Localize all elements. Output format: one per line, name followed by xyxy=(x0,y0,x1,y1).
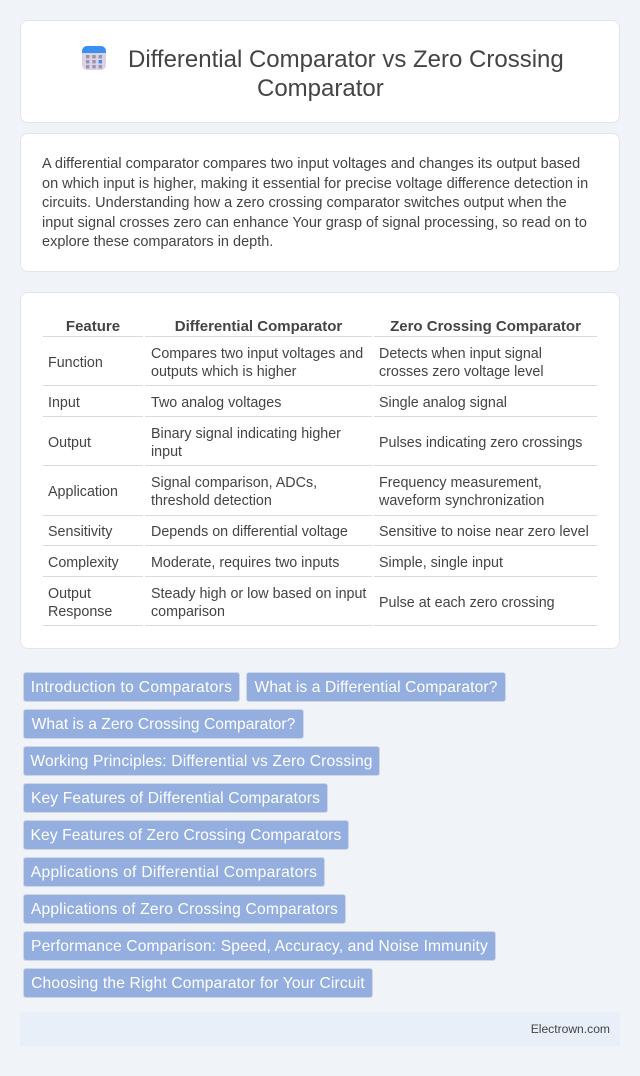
row: function xyxy=(48,346,544,380)
row: function: Compares two input voltages and xyxy=(151,346,363,362)
row: output: Pulses indicating zero crossings xyxy=(379,435,582,451)
row: complexity: Complexity xyxy=(48,555,119,571)
tag: applications zero crossing xyxy=(23,894,346,924)
row: application: Frequency measurement, xyxy=(379,475,542,491)
row: sensitivity: Sensitivity xyxy=(48,524,112,540)
tag: features zero crossing xyxy=(23,820,349,850)
footer xyxy=(20,1012,620,1046)
tag: zero crossing xyxy=(23,709,304,739)
tag: zero crossing: What is a Zero Crossing Comparator? xyxy=(32,716,295,733)
row: application xyxy=(48,475,544,509)
topic tags xyxy=(23,672,506,998)
table header: Feature xyxy=(66,318,120,335)
row: application: waveform synchronization xyxy=(379,493,544,509)
table header xyxy=(66,318,581,335)
tag: introduction: Introduction to Comparators xyxy=(31,679,232,696)
tag: introduction xyxy=(23,672,240,702)
row: output response: Output xyxy=(48,586,91,602)
row: input: Input xyxy=(48,395,80,411)
tag: choosing xyxy=(23,968,373,998)
row: application: Application xyxy=(48,484,118,500)
row: input: Single analog signal xyxy=(379,395,507,411)
row: output xyxy=(48,426,582,460)
row: application: Signal comparison, ADCs, xyxy=(151,475,317,491)
icon: calendar xyxy=(82,46,106,70)
table header: Differential Comparator xyxy=(175,318,342,335)
intro paragraph: circuits. Understanding how a zero crossing comparator switches output when the xyxy=(42,195,567,211)
intro paragraph xyxy=(42,156,588,250)
footer brand: Electrown.com xyxy=(531,1022,610,1036)
row: output: Binary signal indicating higher xyxy=(151,426,341,442)
tag: features differential xyxy=(23,783,328,813)
intro paragraph: input signal crosses zero can enhance Your grasp of signal processing, so read on to xyxy=(42,215,587,231)
row: sensitivity: Depends on differential voltage xyxy=(151,524,348,540)
tag: working principles xyxy=(23,746,380,776)
tag: features zero crossing: Key Features of Zero Crossing Comparators xyxy=(31,827,341,844)
panel: introduction text xyxy=(20,133,620,272)
row: function: crosses zero voltage level xyxy=(379,364,544,380)
tag: performance xyxy=(23,931,496,961)
panel: title card xyxy=(20,20,620,123)
intro paragraph: on which input is higher, making it essential for precise voltage difference detection in xyxy=(42,176,588,192)
row: sensitivity xyxy=(48,524,589,540)
tag: choosing: Choosing the Right Comparator for Your Circuit xyxy=(31,975,365,992)
row: complexity xyxy=(48,555,503,571)
intro paragraph: explore these comparators in depth. xyxy=(42,234,273,250)
tag: applications differential: Applications of Differential Comparators xyxy=(31,864,317,881)
row: complexity: Moderate, requires two inputs xyxy=(151,555,339,571)
row: complexity: Simple, single input xyxy=(379,555,503,571)
title xyxy=(128,46,564,102)
row: function: Function xyxy=(48,355,103,371)
row: output response: Response xyxy=(48,604,112,620)
tag: working principles: Working Principles: Differential vs Zero Crossing xyxy=(30,753,373,770)
row: output: input xyxy=(151,444,182,460)
row: function: Detects when input signal xyxy=(379,346,542,362)
row: output response xyxy=(48,586,555,620)
title: Comparator xyxy=(257,75,384,102)
tag: performance: Performance Comparison: Speed, Accuracy, and Noise Immunity xyxy=(31,938,488,955)
panel: comparison table xyxy=(20,292,620,649)
row: function: outputs which is higher xyxy=(151,364,296,380)
row: application: threshold detection xyxy=(151,493,272,509)
tag: differential xyxy=(246,672,506,702)
row: input: Two analog voltages xyxy=(151,395,281,411)
title: Differential Comparator vs Zero Crossing xyxy=(128,46,564,73)
tag: applications zero crossing: Applications of Zero Crossing Comparators xyxy=(31,901,338,918)
tag: applications differential xyxy=(23,857,325,887)
row: output: Output xyxy=(48,435,91,451)
row: output response: comparison xyxy=(151,604,225,620)
tag: features differential: Key Features of Differential Comparators xyxy=(31,790,320,807)
row: output response: Steady high or low based on input xyxy=(151,586,366,602)
tag: differential: What is a Differential Comparator? xyxy=(254,679,498,696)
table header: Zero Crossing Comparator xyxy=(390,318,581,335)
row: input xyxy=(48,395,507,411)
row: sensitivity: Sensitive to noise near zero level xyxy=(379,524,589,540)
row: output response: Pulse at each zero crossing xyxy=(379,595,555,611)
intro paragraph: A differential comparator compares two input voltages and changes its output based xyxy=(42,156,580,172)
